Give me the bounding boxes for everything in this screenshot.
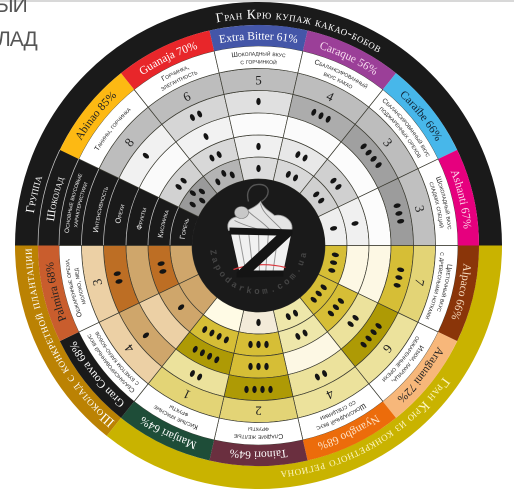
outer band: left bottom: [26, 246, 114, 427]
Alpaco name: Alpaco 66%: [452, 263, 471, 320]
Ashanti flavour, line 2: сладких специй: [430, 182, 444, 228]
header: bitterness: Горечь: [180, 218, 189, 239]
icon: frosting swirls: [234, 204, 282, 230]
Extra Bitter flavour, line 2: с горчинкой: [240, 60, 276, 64]
outer title: top: Гран Крю купаж какао-бобов: [212, 0, 388, 57]
Caraibe name: Caraïbe 66%: [401, 91, 442, 141]
Tainori flavour: Сладкие желтые: [233, 432, 284, 441]
Caraibe flavour, line 2: поджаренных орехов: [379, 106, 421, 158]
Abinao intensity: 8: [125, 138, 134, 146]
Gran Couva intensity: 4: [121, 341, 137, 356]
Manjari beans: [182, 325, 230, 385]
Tainori beans: [244, 319, 273, 393]
Alpaco beans: [328, 252, 405, 288]
Ashanti beans: [328, 203, 405, 239]
Caraibe beans: [307, 142, 383, 211]
Tainori flavour, line 2: фрукты: [247, 425, 269, 433]
Tainori name: Tainori 64%: [229, 447, 288, 461]
Guanaja name: Guanaja 70%: [140, 42, 198, 74]
watermark: Zapodarkom.com.ua: [207, 249, 310, 297]
icon: case pleats: [238, 232, 278, 276]
Manjari flavour, line 2: фрукты: [167, 403, 190, 419]
icon: red smear: [234, 265, 286, 270]
header: group: Группа: [26, 176, 42, 214]
Guanaja flavour, line 2: элегантность: [161, 72, 198, 90]
Guanaja intensity: 6: [184, 92, 190, 101]
Gran Couva flavour, line 2: с букетом какао-бобов: [91, 329, 142, 389]
Abinao flavour: Танины, горчинка: [94, 108, 131, 150]
header: fruits: Фрукты: [136, 208, 146, 230]
Araguani flavour, line 2: обжаренные орехи: [382, 336, 419, 382]
Caraque beans: [281, 108, 332, 184]
sector: Manjari: [121, 298, 244, 460]
outer title: left bottom: Шоколад с конкретной плантации: [0, 242, 120, 440]
Caraibe intensity: 3: [383, 138, 392, 146]
sector: Extra Bitter: [210, 24, 308, 181]
Araguani intensity: 6: [383, 345, 392, 353]
Palmira beans: [113, 261, 167, 284]
Extra Bitter name: Extra Bitter 61%: [218, 32, 298, 44]
Caraque flavour, line 2: вкус какао: [324, 72, 352, 88]
Gran Couva beans: [142, 303, 185, 339]
Tainori intensity: 2: [255, 404, 262, 418]
Manjari intensity: 1: [181, 386, 193, 403]
Ashanti intensity: 3: [415, 206, 424, 212]
header: main flavour characteristics: Основные вкусовые: [64, 173, 82, 233]
Araguani flavour: Изюм, лакрица,: [392, 345, 424, 382]
sector: Ashanti: [318, 150, 479, 246]
icon: curl stem: [248, 184, 268, 202]
sector: Abinao: [60, 73, 217, 217]
Alpaco flavour, line 2: с древесными нотками: [425, 252, 444, 320]
icon: cherry: [234, 206, 248, 218]
Nyangbo name: Nyangbo 68%: [314, 411, 383, 454]
Nyangbo beans: [285, 309, 328, 381]
Palmira intensity: 3: [89, 277, 105, 287]
Palmira flavour, line 2: молоко, мед: [72, 266, 88, 305]
sector: header column: [26, 150, 198, 246]
outer band: right bottom: [114, 246, 490, 477]
Gran Couva flavour: Сбалансированный вкус: [83, 331, 137, 396]
icon: letter Z: [230, 228, 292, 278]
outer title: right bottom: Гран Крю из конкретного региона: [274, 372, 464, 500]
sector: Guanaja: [121, 30, 244, 194]
Extra Bitter beans: [256, 98, 261, 172]
Araguani name: Araguani 72%: [398, 346, 443, 402]
Palmira flavour: Обжаренные орехи,: [62, 257, 84, 319]
header: nuts: Орехи: [115, 204, 124, 224]
sector: Palmira: [38, 245, 198, 341]
Gran Couva name: Gran Couva 68%: [64, 337, 128, 412]
Caraque name: Caraque 56%: [320, 42, 378, 75]
Caraque flavour: Сбалансированный: [314, 60, 368, 89]
Nyangbo flavour, line 2: со специями: [318, 398, 357, 423]
sector: Araguani: [300, 274, 457, 418]
Caraque intensity: 4: [326, 93, 334, 102]
Nyangbo intensity: 4: [324, 386, 336, 403]
Ashanti name: Ashanti 67%: [450, 171, 472, 229]
sector: Tainori: [210, 310, 308, 466]
Abinao beans: [136, 146, 211, 212]
Guanaja beans: [184, 109, 236, 186]
Ashanti flavour: Шоколадный вкус: [436, 176, 452, 230]
sector: Gran Couva: [60, 274, 217, 418]
outer band: top: [26, 14, 490, 246]
Abinao name: Abinao 85%: [76, 92, 116, 141]
header: main flavour characteristics, line 2: характеристики: [74, 182, 88, 228]
icon: cupcake frosting: [228, 202, 292, 232]
Extra Bitter flavour: Шоколадный вкус: [232, 51, 286, 58]
Guanaja flavour: Горчинка,: [161, 66, 190, 81]
sector: Alpaco: [318, 245, 479, 342]
Alpaco flavour: Цветочный вкус: [437, 264, 452, 312]
Extra Bitter intensity: 5: [256, 76, 262, 84]
Caraibe flavour: Сбалансированный вкус: [382, 98, 430, 157]
sector: Caraque: [273, 30, 396, 194]
header: acidity: Кислинка: [158, 210, 169, 238]
sector: Caraibe: [300, 73, 458, 216]
Alpaco intensity: 7: [416, 280, 424, 286]
Araguani beans: [307, 280, 383, 349]
header: chocolate: Шоколад: [46, 176, 66, 222]
Nyangbo flavour: Шоколадный вкус: [314, 401, 368, 434]
Palmira name: Palmira 68%: [42, 260, 70, 323]
icon: cupcake case: [230, 232, 292, 276]
Manjari name: Manjari 64%: [137, 413, 199, 453]
Manjari flavour: Кислые красные: [151, 402, 200, 432]
centre logo: [192, 179, 325, 312]
header: intensity: Интенсивность: [92, 187, 108, 232]
sector: Nyangbo: [274, 298, 396, 460]
